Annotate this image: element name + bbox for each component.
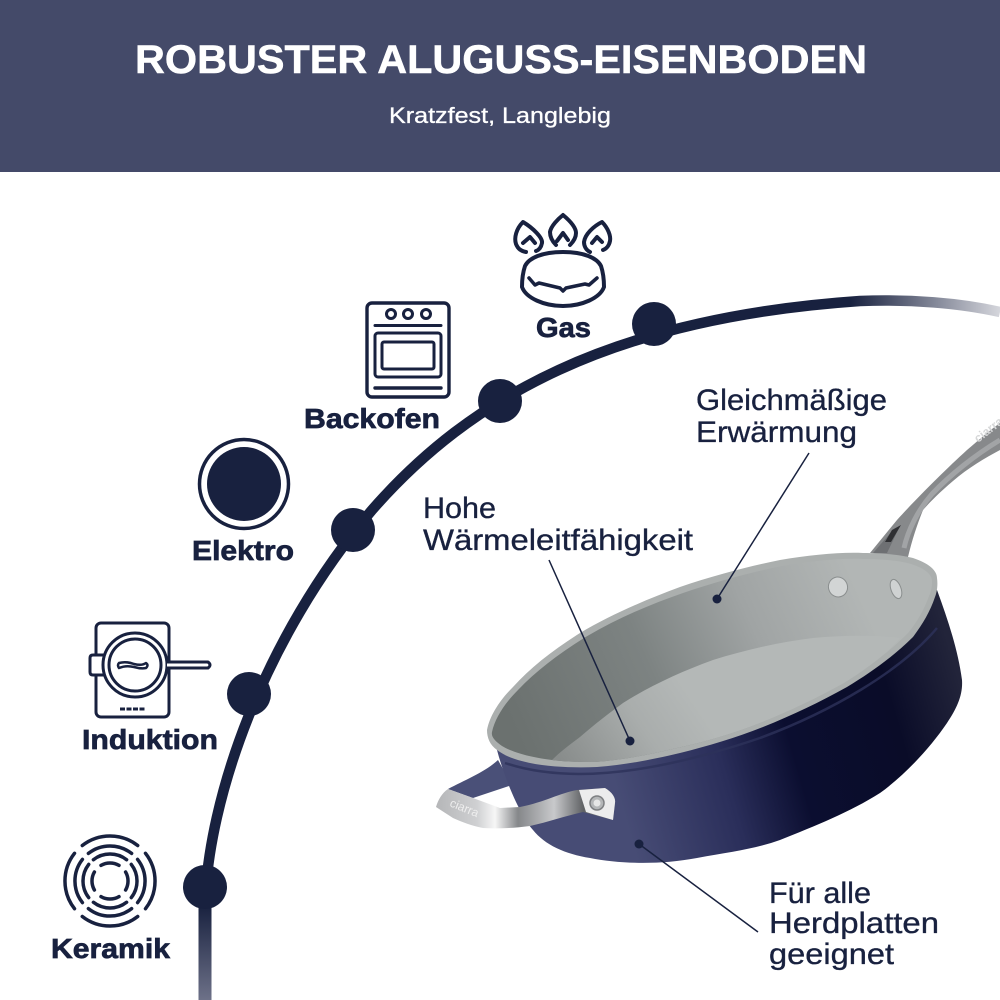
curved cooktop timeline bbox=[183, 300, 1000, 1000]
front steel handle bbox=[436, 788, 615, 828]
label: Keramik: Keramik bbox=[51, 933, 170, 964]
callout: Für alle Herdplatten geeignet bbox=[634, 840, 939, 971]
callout: Gleichmäßige Erwärmung bbox=[696, 384, 887, 604]
rim band shading bbox=[505, 628, 937, 774]
icon: electric hob bbox=[200, 440, 288, 528]
callout: Hohe Wärmeleitfähigkeit: Hohe bbox=[423, 492, 496, 525]
timeline node: Induktion bbox=[227, 672, 271, 716]
callout: Für alle Herdplatten geeignet: Herdplatten bbox=[769, 907, 939, 940]
rear side handle bbox=[448, 760, 512, 798]
callout: Hohe Wärmeleitfähigkeit: Wärmeleitfähigkeit bbox=[423, 524, 694, 557]
long steel handle bbox=[870, 414, 1000, 557]
frying pan bbox=[436, 414, 1000, 863]
timeline node: Elektro bbox=[331, 508, 375, 552]
icon: oven bbox=[367, 303, 449, 397]
inner pan wall bbox=[492, 559, 932, 762]
icon: gas burner bbox=[515, 215, 610, 306]
label: Elektro: Elektro bbox=[192, 535, 294, 566]
title: ROBUSTER ALUGUSS-EISENBODEN bbox=[135, 38, 867, 82]
timeline node: Keramik bbox=[183, 865, 227, 909]
callout: Für alle Herdplatten geeignet: geeignet bbox=[769, 938, 895, 971]
cooking surface bbox=[552, 636, 900, 762]
rim bbox=[487, 553, 937, 767]
label: Induktion: Induktion bbox=[82, 724, 218, 755]
label: Backofen: Backofen bbox=[304, 403, 440, 434]
icon: ceramic rings bbox=[65, 836, 155, 926]
rivets bbox=[826, 574, 904, 600]
label: Gas: Gas bbox=[536, 312, 591, 343]
icon: induction hob bbox=[90, 623, 210, 717]
handle logo: ciarra bbox=[448, 796, 481, 820]
header banner bbox=[0, 0, 1000, 172]
callout: Gleichmäßige Erwärmung: Gleichmäßige bbox=[696, 384, 887, 417]
subtitle: Kratzfest, Langlebig bbox=[389, 103, 611, 128]
callout: Gleichmäßige Erwärmung: Erwärmung bbox=[696, 416, 857, 449]
pan body bbox=[497, 590, 962, 863]
callout: Für alle Herdplatten geeignet: Für alle bbox=[769, 877, 871, 910]
timeline node: Backofen bbox=[478, 379, 522, 423]
timeline node: Gas bbox=[632, 302, 676, 346]
callout: Hohe Wärmeleitfähigkeit bbox=[423, 492, 694, 746]
